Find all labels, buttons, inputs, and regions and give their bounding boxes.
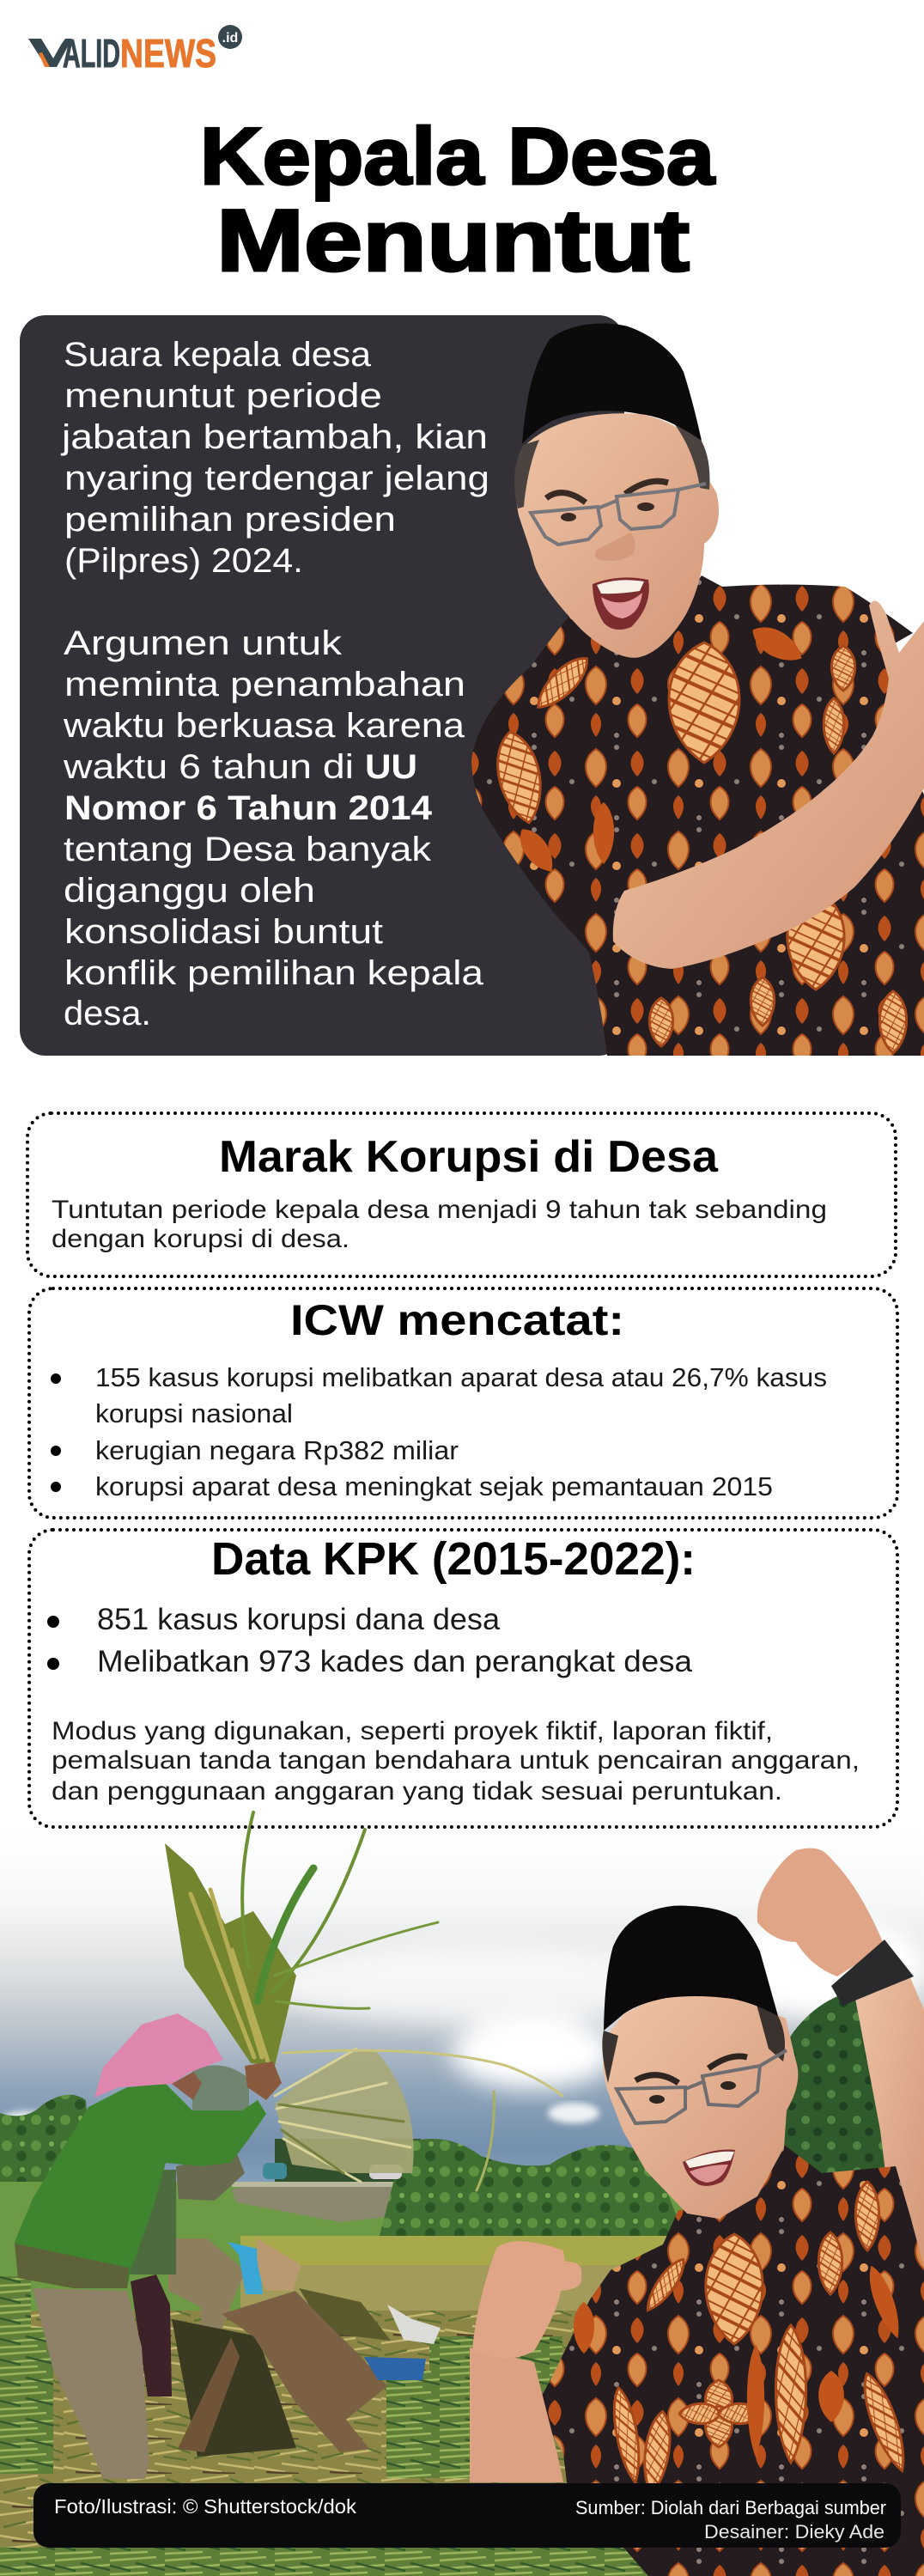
logo: Validnews.id: NEWS — [120, 31, 216, 76]
panel: ICW mencatat: 155 kasus korupsi melibatkan aparat desa atau 26,7% kasus — [95, 1362, 827, 1392]
mouth — [683, 2150, 735, 2186]
text: intro paragraphs: meminta penambahan — [64, 666, 465, 703]
footer credits bar: Sumber: Diolah dari Berbagai sumber — [575, 2497, 886, 2518]
straw bundle — [275, 2049, 414, 2182]
shirt — [471, 575, 924, 1056]
raised fist — [757, 1848, 884, 1976]
eyes — [561, 502, 654, 521]
panel: Data KPK — [29, 1530, 897, 1827]
blue tarp — [364, 2357, 426, 2380]
blouse hem — [15, 2244, 129, 2288]
text: intro paragraphs: waktu berkuasa karena — [63, 707, 465, 745]
face — [515, 413, 719, 658]
side hair — [514, 423, 710, 509]
glasses — [531, 484, 706, 545]
basket sleeve — [176, 2152, 245, 2201]
text: intro paragraphs: desa. — [64, 995, 151, 1032]
olive undergarment — [129, 2170, 176, 2275]
left forearm — [470, 2348, 563, 2482]
small clouds — [2, 2103, 599, 2128]
panel: Marak Korupsi di Desa: Tuntutan periode kepala desa menjadi 9 tahun tak sebanding — [52, 1196, 827, 1224]
panel: Data KPK: dan penggunaan anggaran yang tidak sesuai peruntukan. — [52, 1777, 782, 1806]
panel: Marak Korupsi di Desa: Marak Korupsi di Desa — [219, 1132, 719, 1182]
text: intro paragraphs: UU — [365, 748, 417, 786]
watch — [831, 1940, 914, 2006]
text: intro paragraphs: (Pilpres) 2024. — [64, 542, 303, 580]
dry field — [240, 2265, 687, 2334]
text: intro paragraphs: tentang Desa banyak — [64, 831, 432, 868]
panel: Marak Korupsi di Desa — [27, 1113, 896, 1276]
forearm and hand — [613, 600, 924, 969]
panel: Data KPK: pemalsuan tanda tangan bendahara untuk pencairan anggaran, — [52, 1746, 860, 1775]
blue shirt — [228, 2242, 263, 2294]
nose — [595, 533, 635, 561]
logo: Validnews.id: .id — [222, 31, 238, 46]
rice row — [240, 2236, 687, 2265]
panel: Data KPK: Data KPK (2015-2022): — [211, 1533, 696, 1585]
raised arm — [850, 1971, 924, 2285]
text: intro paragraphs: konflik pemilihan kepala — [64, 954, 484, 992]
face — [603, 1993, 798, 2219]
motorcycles — [263, 2163, 402, 2179]
panel: ICW mencatat — [29, 1288, 897, 1518]
text: intro paragraphs: Nomor 6 Tahun 2014 — [64, 789, 433, 827]
shadow under bench — [172, 2319, 296, 2457]
panel: intro dark background — [20, 315, 624, 1056]
glasses — [617, 2050, 787, 2123]
panel: Data KPK: Melibatkan 973 kades dan perangkat desa — [97, 1645, 693, 1678]
sky — [0, 1830, 924, 2190]
text: intro paragraphs: nyaring terdengar jelang — [64, 460, 489, 497]
bent worker — [168, 2238, 246, 2337]
road and wall — [232, 2186, 429, 2222]
footer credits bar: Desainer: Dieky Ade — [704, 2521, 884, 2543]
illustration: farmer and worker — [15, 2013, 441, 2479]
white sack — [387, 2305, 441, 2344]
dark leg — [131, 2275, 172, 2396]
text: intro paragraphs: jabatan bertambah, kian — [61, 418, 488, 456]
hands — [245, 2061, 282, 2100]
panel: ICW mencatat: kerugian negara Rp382 miliar — [95, 1435, 459, 1465]
panel: Marak Korupsi di Desa: dengan korupsi di desa. — [52, 1225, 350, 1253]
illustration: rice field background — [0, 1830, 924, 2576]
text: intro paragraphs: Suara kepala desa — [64, 336, 372, 374]
title: Menuntut — [216, 192, 690, 289]
field base — [0, 2182, 924, 2576]
title — [200, 111, 715, 289]
illustration: shouting man in batik shirt — [471, 323, 924, 1056]
hijab — [94, 2013, 223, 2098]
batik motifs — [490, 619, 907, 1053]
bench — [222, 2291, 387, 2452]
title: Kepala Desa — [200, 111, 715, 201]
eyes — [649, 2081, 736, 2104]
trousers — [33, 2288, 149, 2479]
panel: Data KPK: 851 kasus korupsi dana desa — [97, 1603, 501, 1636]
logo: Validnews.id — [28, 25, 242, 76]
tree lines — [0, 1993, 924, 2208]
hat — [522, 323, 702, 444]
panel: ICW mencatat: korupsi nasional — [95, 1398, 293, 1428]
face mask — [172, 2072, 202, 2100]
eyebrows — [635, 2056, 747, 2083]
text: intro paragraphs: menuntut periode — [64, 377, 382, 415]
open mouth — [593, 577, 649, 630]
text: intro paragraphs: pemilihan presiden — [64, 501, 396, 539]
batik motifs — [574, 2182, 913, 2494]
side hair — [602, 2001, 785, 2083]
sheaves of green rice — [0, 2276, 653, 2576]
clouds — [258, 1915, 924, 2089]
panel: Data KPK: Modus yang digunakan, seperti proyek fiktif, laporan fiktif, — [52, 1717, 773, 1745]
text: intro paragraphs: waktu 6 tahun di — [63, 748, 354, 786]
panel: ICW mencatat: ICW mencatat: — [290, 1296, 624, 1344]
bushes — [378, 2139, 687, 2242]
footer credits bar: Foto/Ilustrasi: © Shutterstock/dok — [54, 2495, 357, 2518]
text: intro paragraphs: Argumen untuk — [64, 624, 343, 662]
hay ground — [0, 2311, 687, 2576]
text: intro paragraphs: diganggu oleh — [64, 872, 315, 910]
hay pile — [299, 2288, 391, 2341]
illustration: rice bundle — [165, 1812, 562, 2190]
conical hat — [257, 2238, 301, 2291]
illustration: man with raised fists — [470, 1848, 924, 2576]
green blouse — [15, 2084, 266, 2288]
text: intro paragraphs: konsolidasi buntut — [64, 913, 383, 951]
panel: ICW mencatat: korupsi aparat desa meningkat sejak pemantauan 2015 — [95, 1471, 773, 1501]
shirt — [537, 2145, 924, 2576]
eyebrows — [546, 481, 668, 502]
hat — [604, 1905, 778, 2031]
footer credits bar — [33, 2483, 901, 2548]
text: intro paragraphs — [61, 336, 489, 1032]
left fist — [472, 2241, 581, 2359]
logo: Validnews.id: ALID — [63, 31, 120, 76]
